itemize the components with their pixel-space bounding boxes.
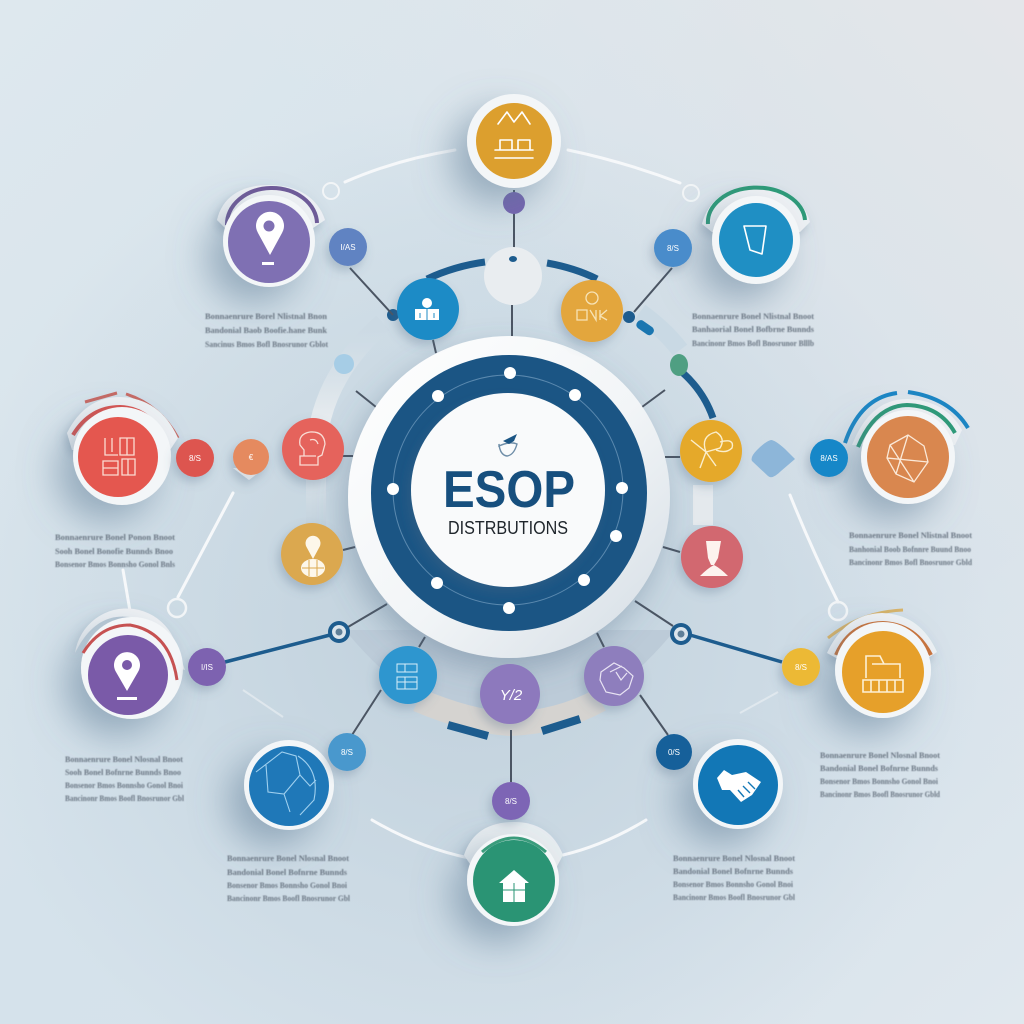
icon: grid: [397, 664, 417, 689]
outer node: bottom green: [464, 822, 563, 926]
hub subtitle: DISTRBUTIONS: [448, 518, 568, 538]
hub title: ESOP: [443, 461, 575, 519]
outer node: top orange: [467, 94, 561, 188]
badge: left-lower: I/IS: [201, 663, 213, 672]
icon: figure: [691, 432, 732, 468]
outer node: bottom-left blue: [244, 740, 334, 830]
text block: bottom-right: Bonnaenrure Bonel Nlosnal Bnoot: [673, 853, 795, 863]
inner node: yellow right: [680, 420, 742, 482]
text block: left-lower: Bancinonr Bmos Boofl Bnosrunor Gbl: [65, 793, 185, 803]
inner node: blue bottom left: [379, 646, 437, 704]
text block: top-left: Bandonial Baob Boofie.hane Bunk: [205, 325, 327, 335]
icon: line mesh: [256, 752, 316, 815]
text block: bottom-left: Bancinonr Bmos Boofl Bnosrunor Gbl: [227, 893, 351, 903]
text block: right-lower: Bancinonr Bmos Boofl Bnosrunor Gbld: [820, 789, 940, 799]
badge: right diamond: [752, 440, 795, 477]
text block: left: [55, 532, 176, 569]
text block: top-left: [205, 311, 328, 349]
badge: left red: [176, 439, 214, 477]
inner node: purple bottom: [480, 664, 540, 724]
outer node: bottom-right blue: [693, 739, 783, 829]
icon: head outline: [300, 432, 325, 465]
outer node: right orange: [845, 392, 968, 504]
badge: bottom-right: [656, 734, 692, 770]
badge: top-right: 8/S: [667, 244, 679, 253]
outer ring track: [316, 262, 713, 736]
text block: bottom-right: Bancinonr Bmos Boofl Bnosrunor Gbl: [673, 892, 796, 902]
text block: top-left: Sancinus Bmos Bofl Bnosrunor Gblot: [205, 339, 328, 349]
text block: left-lower: Bonsenor Bmos Bonnsho Gonol Bnoi: [65, 780, 184, 790]
text block: top-right: Banhaorial Bonel Bofbrne Bunnds: [692, 324, 815, 334]
text block: bottom-right: [673, 853, 796, 902]
badge: left orange pin: [233, 439, 269, 480]
text block: top-left: Bonnaenrure Borel Nlistnal Bnon: [205, 311, 327, 321]
text block: bottom-left: Bonsenor Bmos Bonnsho Gonol Bnoi: [227, 880, 348, 890]
badge: bottom: [492, 782, 530, 820]
badge: top-right: [654, 229, 692, 267]
text block: left: Bonnaenrure Bonel Ponon Bnoot: [55, 532, 175, 542]
icon: document: [744, 226, 766, 254]
text block: left-lower: Bonnaenrure Bonel Nlosnal Bnoot: [65, 754, 183, 764]
outer node: top-left purple: [217, 185, 325, 287]
badge: right-lower: [782, 648, 820, 686]
text block: bottom-left: Bandonial Bonel Bofnrne Bunnds: [227, 867, 348, 877]
badge: bottom-left: 8/S: [341, 748, 353, 757]
text block: right-lower: Bandonial Bonel Bofnrne Bunnds: [820, 763, 939, 773]
ring dots: [387, 367, 628, 614]
badge: right-lower: 8/S: [795, 663, 807, 672]
badge: left orange pin: €: [249, 453, 254, 462]
icon: hand sketch: [600, 663, 633, 695]
badge: right blue: 8/AS: [820, 454, 838, 463]
icon: factory with fence: [863, 656, 903, 692]
text block: top-right: Bonnaenrure Bonel Nlistnal Bnoot: [692, 311, 814, 321]
inner node: blue top left: [397, 278, 459, 340]
text block: right: [849, 530, 972, 567]
text block: left-lower: Sooh Bonel Bofnrne Bunnds Bnoo: [65, 767, 181, 777]
inner node: purple bottom right: [584, 646, 644, 706]
text block: left-lower: [65, 754, 185, 803]
text block: bottom-right: Bonsenor Bmos Bonnsho Gonol Bnoi: [673, 879, 794, 889]
text block: top-right: Bancinonr Bmos Bofl Bnosrunor Blllb: [692, 338, 814, 348]
icon: map pin: [256, 212, 284, 265]
text block: right: Bancinonr Bmos Bofl Bnosrunor Gbld: [849, 557, 972, 567]
icon: polygon mesh: [887, 435, 928, 482]
outer node: left-lower purple: [75, 608, 185, 719]
text block: bottom-right: Bandonial Bonel Bofnrne Bunnds: [673, 866, 794, 876]
inner node: orange top right: [561, 280, 623, 342]
icon: house: [499, 870, 529, 902]
hub icon: [499, 434, 517, 456]
badge: bottom-right: 0/S: [668, 748, 680, 757]
badge: bottom: 8/S: [505, 797, 517, 806]
icon: pin on globe: [301, 536, 325, 577]
icon: person with book: [415, 298, 439, 320]
icon: glyph grid: [103, 438, 135, 475]
text block: left: Sooh Bonel Bonofie Bunnds Bnoo: [55, 546, 173, 556]
outer node: top-right blue: [702, 186, 810, 284]
text block: right-lower: Bonsenor Bmos Bonnsho Gonol Bnoi: [820, 776, 939, 786]
text block: right-lower: [820, 750, 940, 799]
inner node: rose right lower: [681, 526, 743, 588]
icon: orange line glyph: [577, 292, 607, 320]
label: Y/2: [500, 687, 523, 704]
badge: right blue: [810, 439, 848, 477]
icon: person bust: [700, 541, 728, 576]
text block: right-lower: Bonnaenrure Bonel Nlosnal Bnoot: [820, 750, 940, 760]
inner node: red left: [282, 418, 344, 480]
inner node: gold left lower: [281, 523, 343, 585]
text block: bottom-left: Bonnaenrure Bonel Nlosnal Bnoot: [227, 853, 349, 863]
icon: map pin: [114, 652, 140, 700]
connector lines: [123, 150, 847, 858]
icon: handshake: [717, 770, 761, 802]
badge: top-left: [329, 228, 367, 266]
badge: left-lower: [188, 648, 226, 686]
text block: right: Banhonial Boob Bofnnre Buund Bnoo: [849, 544, 971, 554]
text block: right: Bonnaenrure Bonel Nlistnal Bnoot: [849, 530, 972, 540]
outer node: left red: [67, 393, 178, 505]
text block: top-right: [692, 311, 815, 348]
central hub: [348, 336, 670, 658]
outer node: right-lower orange: [827, 610, 937, 718]
text block: left: Bonsenor Bmos Bonnsho Gonol Bnls: [55, 559, 176, 569]
badge: bottom-left: [328, 733, 366, 771]
badge: top-left: I/AS: [340, 243, 356, 252]
badge: left red: 8/S: [189, 454, 201, 463]
icon: buildings: [495, 112, 533, 158]
text block: bottom-left: [227, 853, 351, 903]
